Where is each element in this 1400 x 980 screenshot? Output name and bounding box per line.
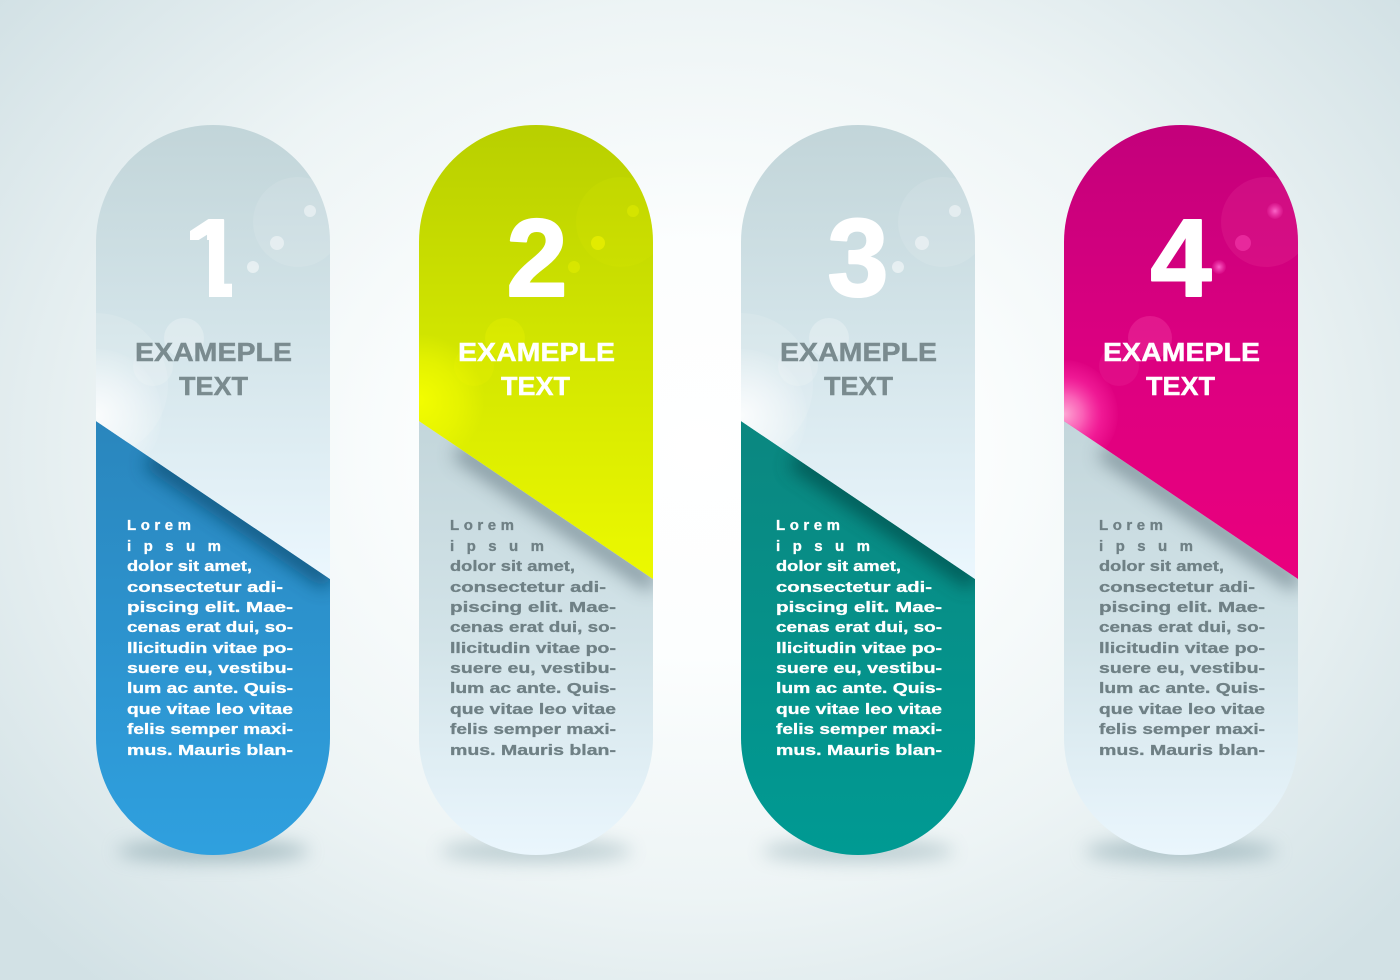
body text: piscing elit. Mae- [1099, 599, 1265, 616]
pale upper band [741, 125, 975, 579]
magenta upper section [1064, 125, 1298, 579]
body text: cenas erat dui, so- [776, 619, 942, 636]
body text: dolor sit amet, [1099, 558, 1224, 575]
body text: Lorem [1099, 517, 1163, 534]
heading: TEXT [179, 371, 248, 401]
body text: consectetur adi- [1099, 579, 1255, 596]
number 1: 1 [182, 197, 244, 320]
body text [127, 517, 293, 759]
body text: mus. Mauris blan- [450, 742, 616, 759]
colored lower section with fold shadow [96, 421, 330, 855]
heading: EXAMEPLE [135, 337, 292, 367]
panel: card 4 [1064, 125, 1298, 871]
lens flares [96, 205, 316, 447]
body text: lum ac ante. Quis- [1099, 680, 1265, 697]
body text: felis semper maxi- [127, 721, 293, 738]
body text: lum ac ante. Quis- [127, 680, 293, 697]
heading: TEXT [1146, 371, 1215, 401]
body text: suere eu, vestibu- [450, 660, 616, 677]
body text: Lorem [127, 517, 191, 534]
heading [458, 337, 615, 401]
green upper section [419, 125, 653, 579]
heading: EXAMEPLE [780, 337, 937, 367]
body text: cenas erat dui, so- [450, 619, 616, 636]
lens flares [419, 205, 639, 445]
panel: card 2 [419, 125, 653, 871]
body text: piscing elit. Mae- [450, 599, 616, 616]
body text: felis semper maxi- [450, 721, 616, 738]
body text: ipsum [1099, 538, 1193, 555]
heading: TEXT [824, 371, 893, 401]
body text: llicitudin vitae po- [776, 640, 942, 657]
body text [776, 517, 942, 759]
body text: llicitudin vitae po- [450, 640, 616, 657]
number 4: 4 [1150, 197, 1212, 320]
body text: consectetur adi- [450, 579, 606, 596]
body text: ipsum [450, 538, 544, 555]
lens flares [741, 205, 961, 448]
number 2: 2 [506, 197, 568, 320]
body text: dolor sit amet, [776, 558, 901, 575]
colored lower section with fold shadow [741, 421, 975, 855]
body text: consectetur adi- [127, 579, 283, 596]
body text: que vitae leo vitae [1099, 701, 1265, 718]
body text: felis semper maxi- [776, 721, 942, 738]
body text: piscing elit. Mae- [776, 599, 942, 616]
body text: que vitae leo vitae [450, 701, 616, 718]
body text: mus. Mauris blan- [127, 742, 293, 759]
body text: Lorem [450, 517, 514, 534]
body text: dolor sit amet, [127, 558, 252, 575]
body text: cenas erat dui, so- [1099, 619, 1265, 636]
body text: ipsum [776, 538, 870, 555]
body text: Lorem [776, 517, 840, 534]
body text: llicitudin vitae po- [127, 640, 293, 657]
heading: TEXT [501, 371, 570, 401]
pale lower section with fold shadow [419, 421, 653, 855]
body text: felis semper maxi- [1099, 721, 1265, 738]
body text: suere eu, vestibu- [127, 660, 293, 677]
number 3: 3 [827, 197, 889, 320]
body text: lum ac ante. Quis- [776, 680, 942, 697]
pale upper band [96, 125, 330, 579]
body text: consectetur adi- [776, 579, 932, 596]
body text: dolor sit amet, [450, 558, 575, 575]
body text: suere eu, vestibu- [776, 660, 942, 677]
heading [1103, 337, 1260, 401]
pill shadow [1085, 840, 1277, 862]
body text [450, 517, 616, 759]
pill shadow [440, 840, 632, 862]
body text: llicitudin vitae po- [1099, 640, 1265, 657]
heading [135, 337, 292, 401]
body text: que vitae leo vitae [776, 701, 942, 718]
body text: ipsum [127, 538, 221, 555]
heading: EXAMEPLE [458, 337, 615, 367]
panel: card 3 [741, 125, 975, 871]
pill shadow [762, 840, 954, 862]
body text [1099, 517, 1265, 759]
pill shadow [117, 840, 309, 862]
panel: card 1 [96, 125, 330, 872]
body text: mus. Mauris blan- [1099, 742, 1265, 759]
body text: que vitae leo vitae [127, 701, 293, 718]
pale lower section with fold shadow [1064, 421, 1298, 855]
body text: piscing elit. Mae- [127, 599, 293, 616]
heading [780, 337, 937, 401]
body text: lum ac ante. Quis- [450, 680, 616, 697]
lens flares [1064, 177, 1298, 446]
body text: suere eu, vestibu- [1099, 660, 1265, 677]
body text: cenas erat dui, so- [127, 619, 293, 636]
body text: mus. Mauris blan- [776, 742, 942, 759]
heading: EXAMEPLE [1103, 337, 1260, 367]
